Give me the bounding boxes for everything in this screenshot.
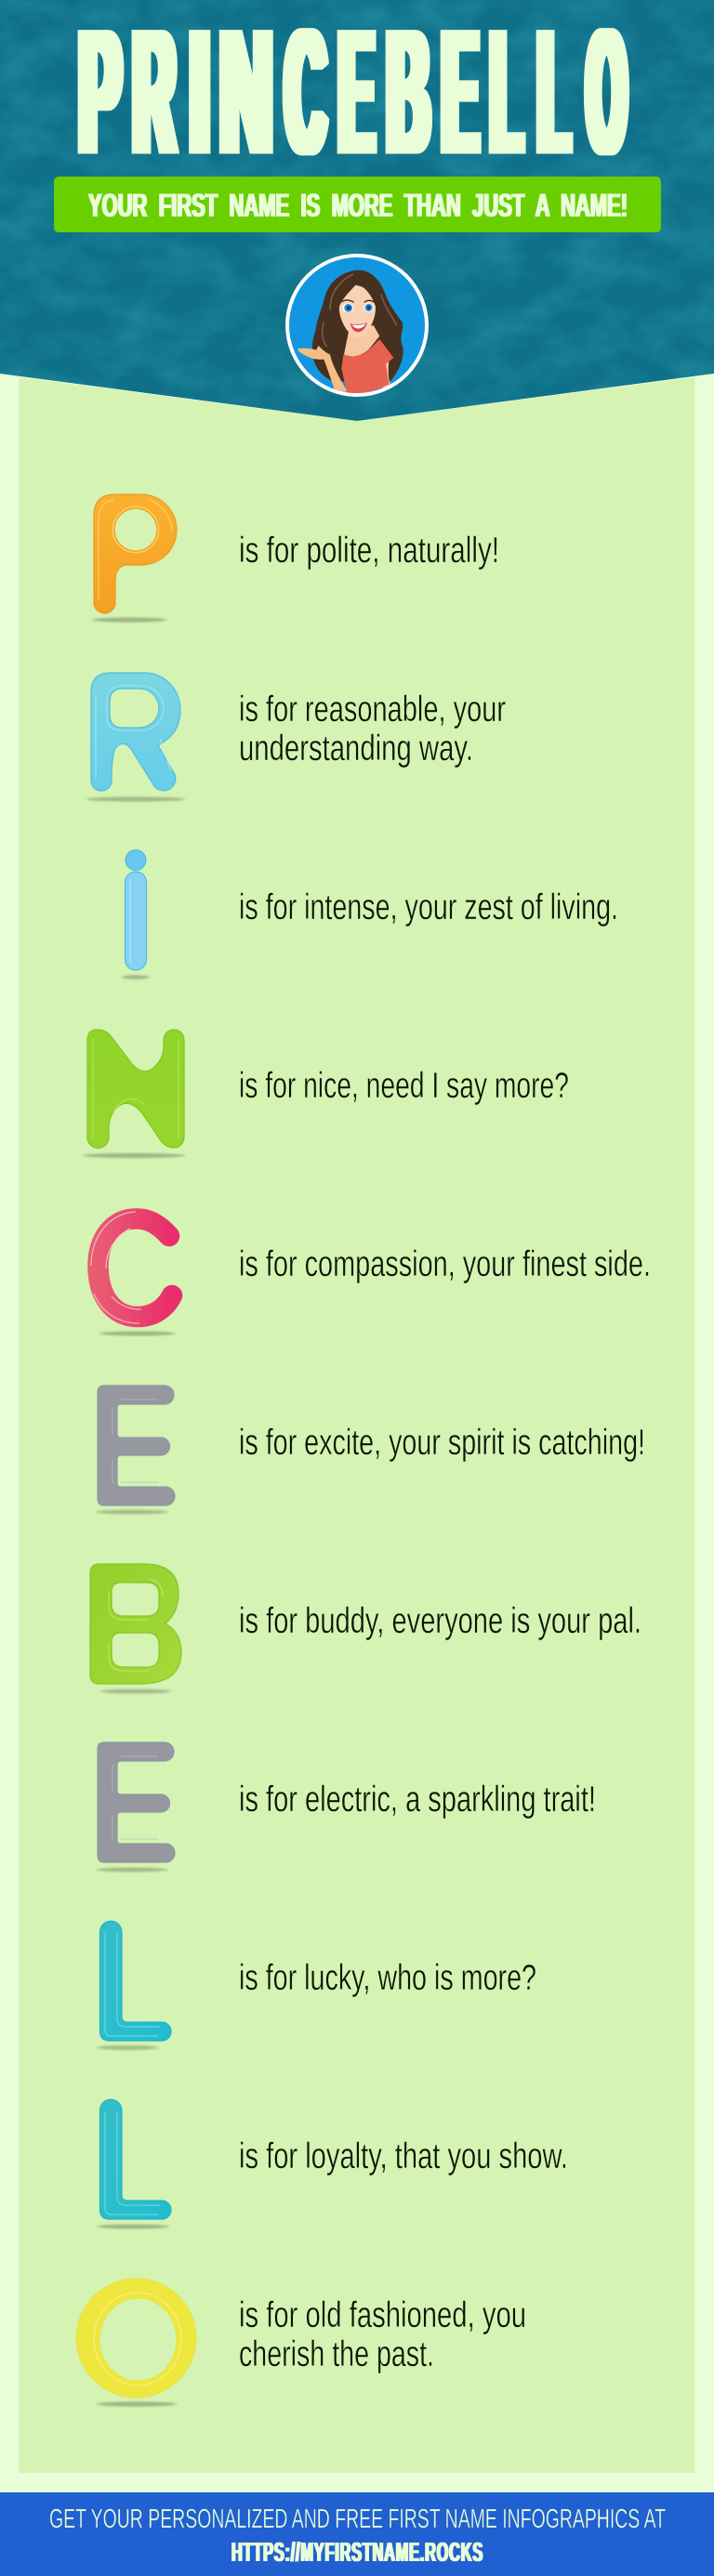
row: letter N xyxy=(83,1030,569,1158)
icon: jelly letter C xyxy=(91,1212,176,1335)
icon: jelly letter B xyxy=(90,1564,181,1693)
row: letter B xyxy=(90,1564,641,1693)
icon: jelly letter E xyxy=(96,1742,175,1872)
row: letter L xyxy=(97,1921,536,2050)
main green panel xyxy=(19,377,695,2473)
text: P: is for polite, naturally! xyxy=(239,531,499,571)
title xyxy=(79,0,626,191)
row: letter R xyxy=(86,673,506,802)
text: L: is for lucky, who is more? xyxy=(239,1958,536,1998)
icon: jelly letter P xyxy=(92,494,177,623)
row: letter O xyxy=(76,2279,526,2407)
text: R: is for reasonable, your xyxy=(239,690,506,729)
row: letter P xyxy=(92,494,499,623)
text: O: is for old fashioned, you xyxy=(239,2295,526,2335)
row: letter E second xyxy=(96,1742,596,1872)
icon: jelly letter N xyxy=(83,1030,185,1158)
text: E second: is for electric, a sparkling trait! xyxy=(239,1780,596,1820)
icon: jelly letter i xyxy=(122,849,150,979)
row: letter I xyxy=(122,849,618,979)
icon: jelly letter L xyxy=(97,2099,171,2228)
footer url: HTTPS://MYFIRSTNAME.ROCKS xyxy=(231,2538,483,2568)
footer xyxy=(0,2492,714,2576)
icon: jelly letter E xyxy=(96,1386,175,1514)
icon: woman avatar xyxy=(285,254,429,397)
subtitle banner xyxy=(54,177,661,232)
header background xyxy=(0,0,714,427)
row: letter E xyxy=(96,1386,645,1514)
row: letter C xyxy=(91,1212,651,1335)
text: N: is for nice, need I say more? xyxy=(239,1066,569,1106)
icon: jelly letter R xyxy=(86,673,185,802)
icon: jelly letter L xyxy=(97,1921,171,2050)
text: R second line: understanding way. xyxy=(239,729,473,769)
row: letter L second xyxy=(97,2099,568,2228)
icon: jelly letter O xyxy=(76,2279,196,2407)
text: O second line: cherish the past. xyxy=(239,2334,434,2374)
text: L second: is for loyalty, that you show. xyxy=(239,2136,568,2176)
